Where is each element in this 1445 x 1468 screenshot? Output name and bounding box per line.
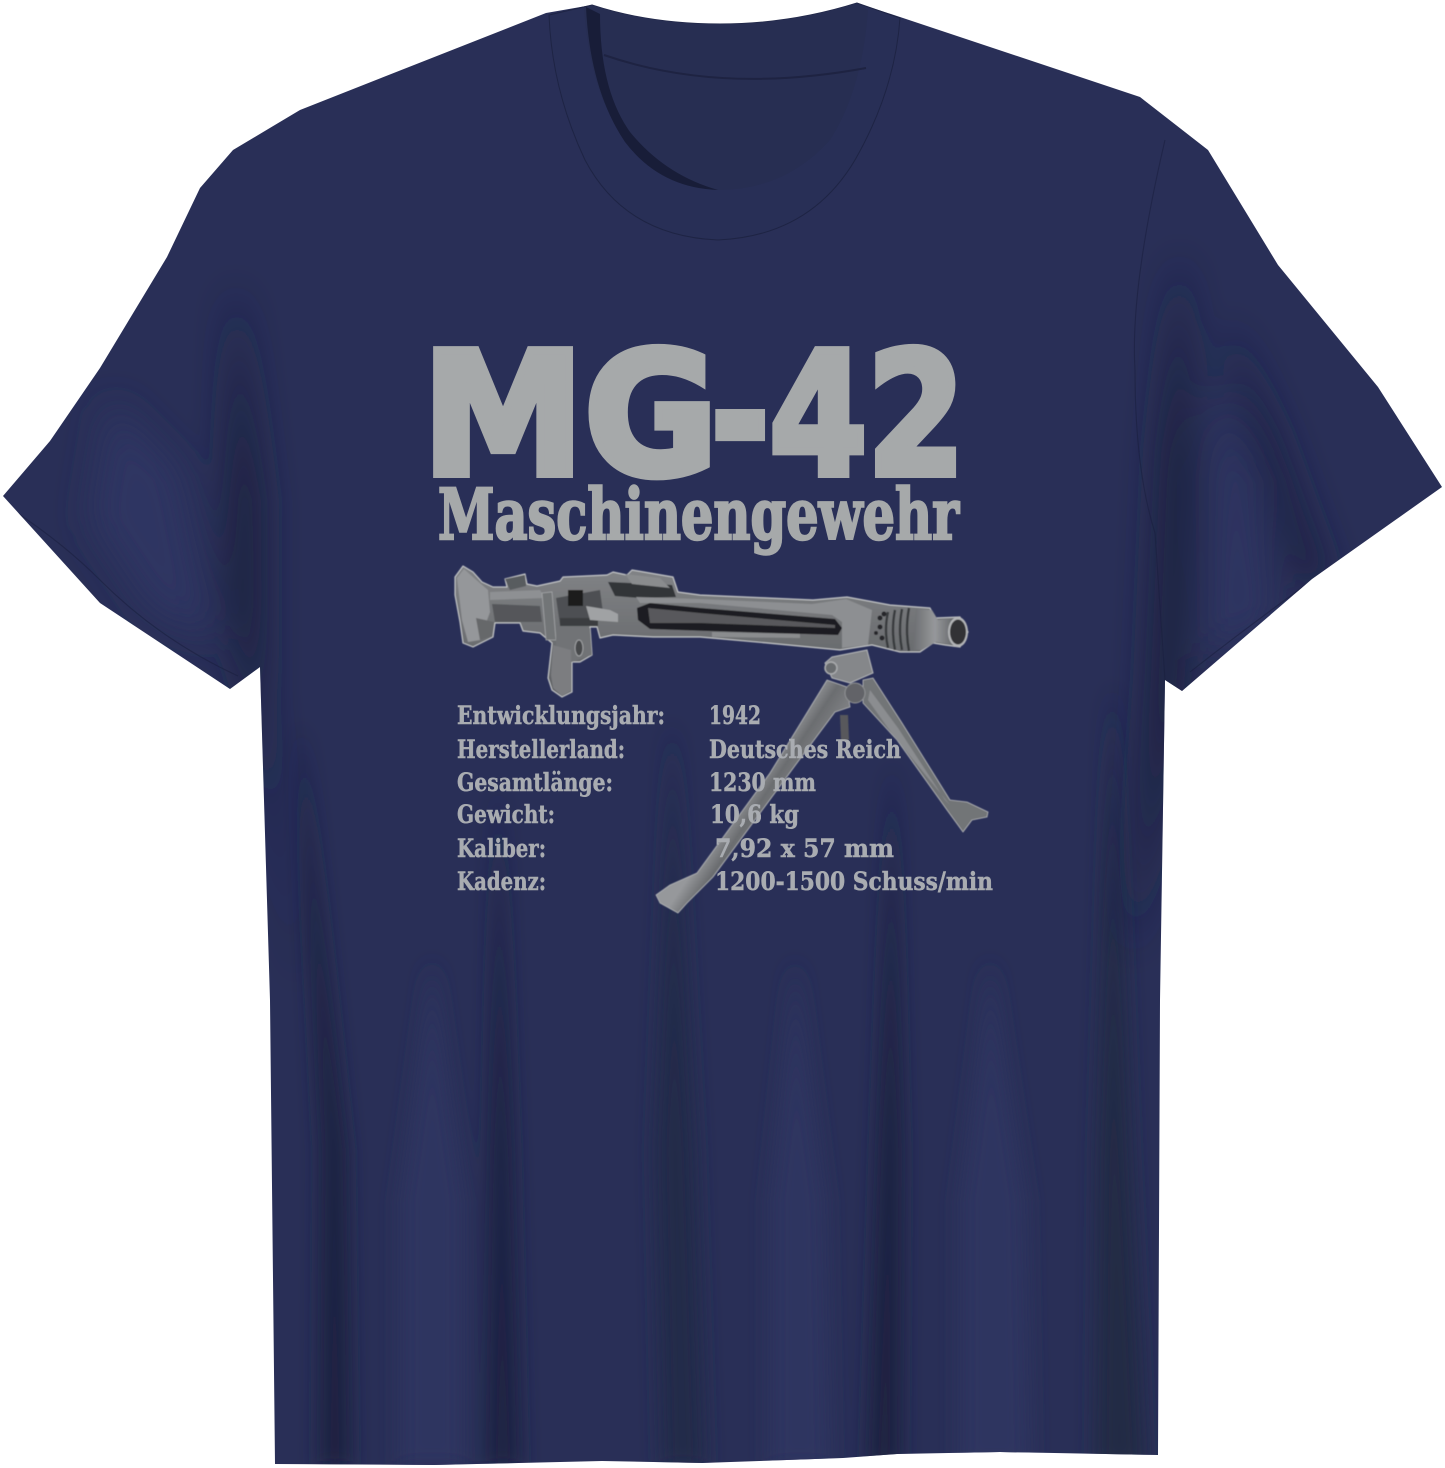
cooling rings — [886, 608, 909, 651]
barrel jacket highlights — [636, 597, 872, 648]
barrel jacket opening — [637, 603, 842, 635]
barrel — [648, 608, 835, 628]
row: overall length: 1230 mm — [709, 768, 816, 797]
pistol grip — [551, 645, 571, 696]
title hyphen and number 42: -42 — [711, 317, 965, 515]
title letters MG: MG — [422, 317, 718, 515]
bipod spring tab — [840, 715, 849, 740]
row: weight: 10,6 kg — [710, 800, 799, 829]
collar ribbing — [549, 3, 900, 240]
row: country of manufacture: Deutsches Reich — [709, 735, 901, 764]
muzzle opening — [948, 617, 968, 647]
machine gun image — [455, 566, 988, 913]
stock shading — [457, 569, 490, 642]
main title — [422, 317, 965, 515]
row: calibre — [457, 834, 894, 863]
row: rate of fire: 1200-1500 Schuss/min — [715, 867, 993, 896]
row: country of manufacture — [457, 735, 901, 764]
row: development year: 1942 — [709, 701, 761, 730]
row: rate of fire: Kadenz: — [457, 867, 546, 896]
receiver details — [490, 574, 676, 662]
receiver, stock, barrel jacket silhouette — [455, 566, 968, 697]
row: weight: Gewicht: — [457, 800, 555, 829]
inner collar shadow — [586, 7, 718, 190]
bipod left leg and foot — [656, 680, 850, 913]
row: calibre: Kaliber: — [457, 834, 546, 863]
subtitle: Maschinengewehr — [438, 473, 960, 556]
row: calibre: 7,92 x 57 mm — [715, 834, 894, 863]
bipod mount — [825, 650, 873, 683]
bipod right leg and foot — [863, 678, 988, 832]
inner neck back panel — [584, 3, 868, 190]
muzzle cone — [912, 609, 958, 650]
row: overall length — [457, 768, 816, 797]
row: country of manufacture: Herstellerland: — [457, 735, 625, 764]
row: overall length: Gesamtlänge: — [457, 768, 613, 797]
row: development year: Entwicklungsjahr: — [457, 701, 665, 730]
row: weight — [457, 800, 799, 829]
bipod hinge — [845, 683, 865, 703]
row: rate of fire — [457, 867, 993, 896]
sleeve and shoulder seams — [18, 140, 1308, 676]
muzzle booster vents — [874, 612, 886, 640]
specification table — [457, 701, 993, 896]
